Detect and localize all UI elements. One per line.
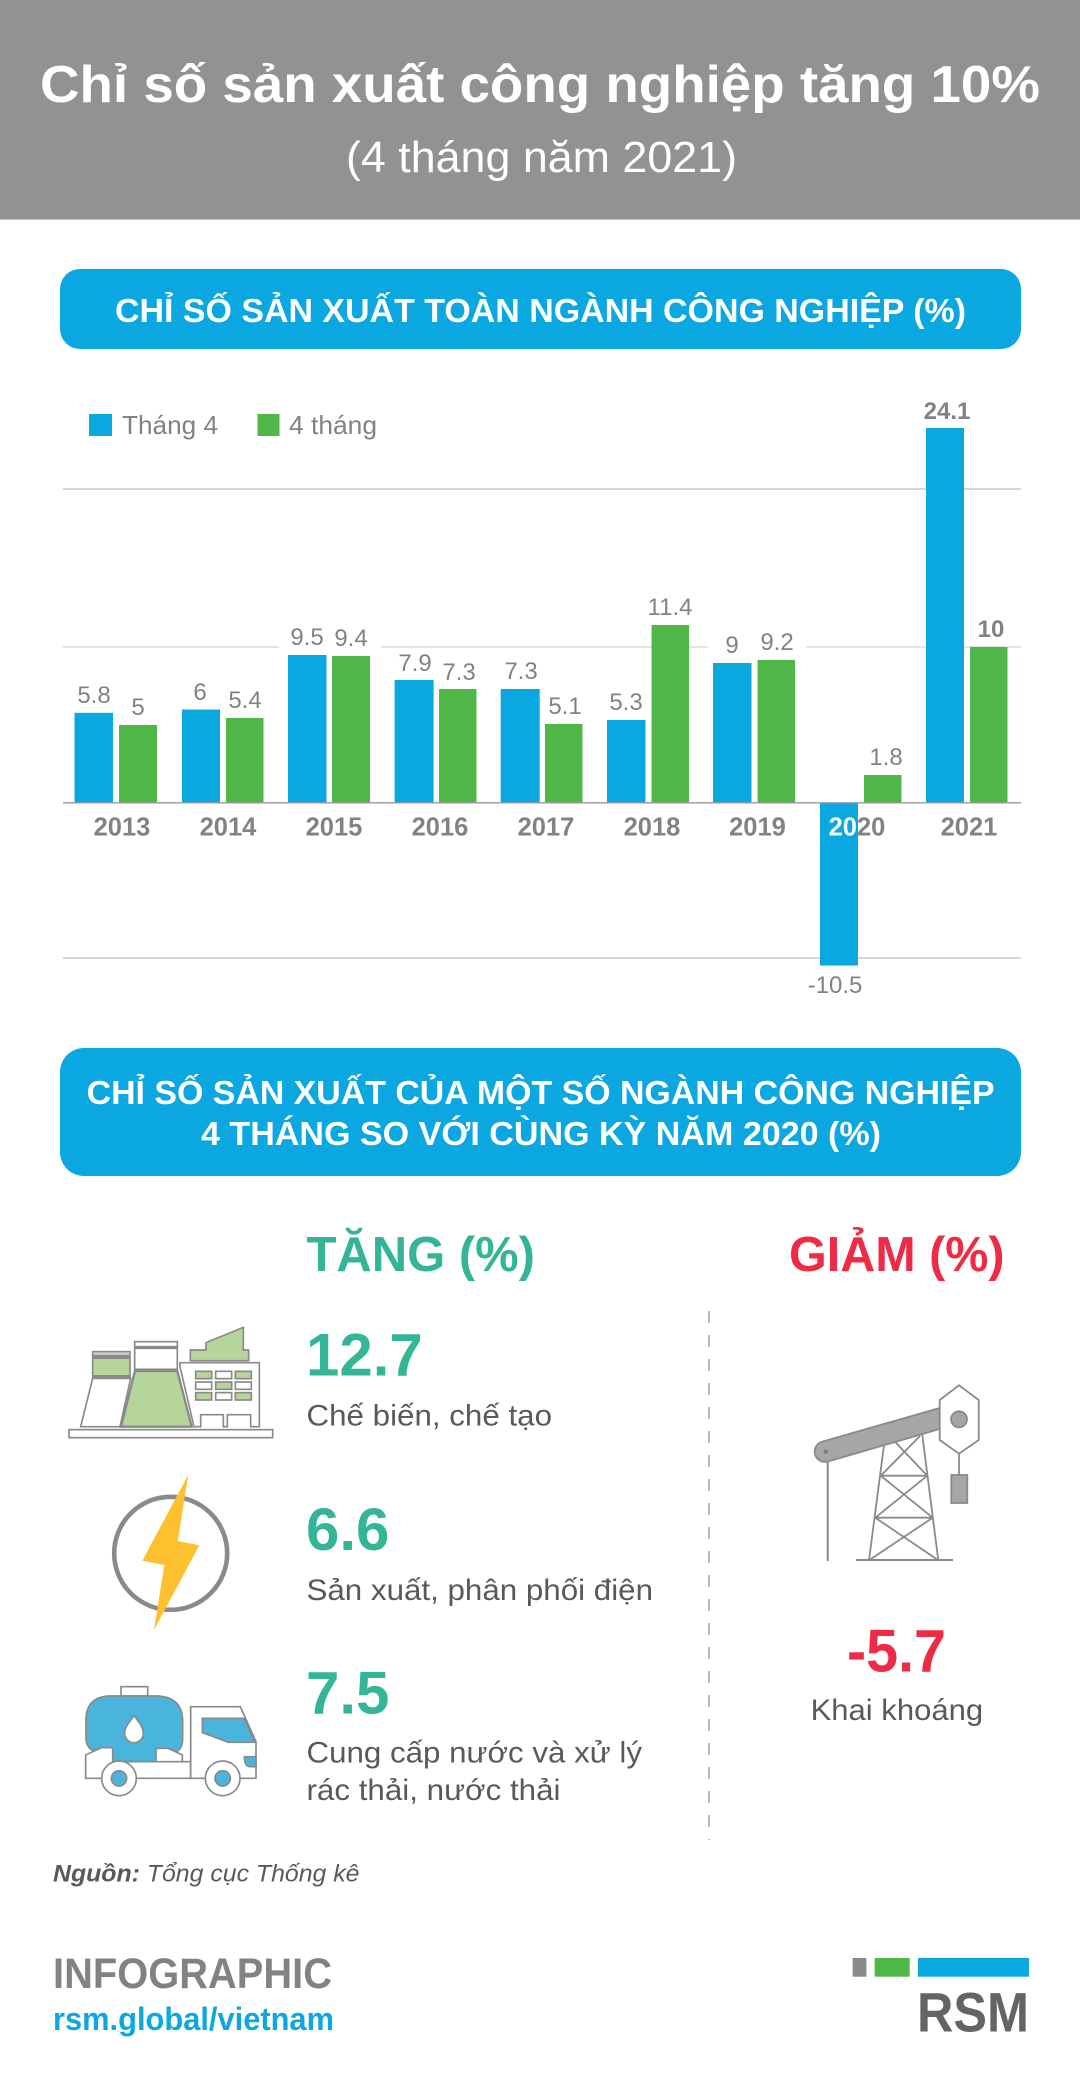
data labels: 4 tháng: 5.4 bbox=[228, 687, 262, 714]
data labels: Tháng 4 bbox=[77, 398, 970, 999]
year axis labels: 2015 bbox=[306, 814, 362, 842]
data labels: 4 tháng: 9.4 bbox=[334, 625, 368, 652]
title: Chỉ số sản xuất công nghiệp tăng 10% bbox=[40, 56, 1040, 114]
data labels: Tháng 4: 5.3 bbox=[609, 689, 643, 716]
stat: manufacturing: 12.7 bbox=[306, 1322, 423, 1388]
data labels: 4 tháng: 11.4 bbox=[648, 594, 692, 621]
header banner bbox=[0, 0, 1080, 220]
icon: lightning bolt bbox=[114, 1475, 227, 1630]
heading: decrease: GIẢM (%) bbox=[789, 1227, 1004, 1282]
year axis labels: 2016 bbox=[412, 814, 468, 842]
legend: 4 tháng bbox=[289, 410, 377, 440]
stat: water and waste: Cung cấp nước và xử lý bbox=[306, 1736, 642, 1770]
stat: water and waste: 7.5 bbox=[306, 1660, 389, 1726]
data labels: 4 tháng: 9.2 bbox=[760, 629, 794, 656]
year axis labels: 2013 bbox=[94, 814, 150, 842]
data labels: Tháng 4: 6 bbox=[193, 679, 207, 706]
year axis labels: 2020 bbox=[829, 814, 885, 842]
data labels: 4 tháng: 7.3 bbox=[442, 659, 476, 686]
data labels: 4 tháng: 1.8 bbox=[869, 744, 903, 771]
data labels: 4 tháng: 5.1 bbox=[548, 693, 582, 720]
icon: oil pump bbox=[815, 1385, 979, 1561]
stat: manufacturing: Chế biến, chế tạo bbox=[306, 1400, 552, 1433]
section heading: industries: 4 THÁNG SO VỚI CÙNG KỲ NĂM 2020 (%) bbox=[201, 1115, 881, 1152]
legend bbox=[89, 410, 377, 440]
section heading: overall index: CHỈ SỐ SẢN XUẤT TOÀN NGÀNH CÔNG NGHIỆP (%) bbox=[115, 291, 966, 329]
data labels: Tháng 4: 7.9 bbox=[398, 650, 432, 677]
year axis labels: 2017 bbox=[518, 814, 574, 842]
subtitle: (4 tháng năm 2021) bbox=[346, 133, 737, 182]
stat: mining: Khai khoáng bbox=[811, 1694, 983, 1727]
stat: electricity bbox=[306, 1496, 653, 1607]
data labels: 4 tháng: 5 bbox=[131, 694, 145, 721]
stat: manufacturing bbox=[306, 1322, 552, 1433]
year axis labels: 2019 bbox=[729, 814, 786, 842]
icon: water truck bbox=[86, 1687, 256, 1796]
data labels: 4 tháng bbox=[131, 594, 1004, 771]
section heading: industries bbox=[60, 1048, 1021, 1176]
year axis labels: 2021 bbox=[941, 814, 997, 842]
footer label: INFOGRAPHIC bbox=[53, 1950, 332, 1998]
stat: electricity: 6.6 bbox=[306, 1496, 389, 1563]
RSM logo: RSM bbox=[917, 1981, 1029, 2044]
section heading: overall index bbox=[60, 269, 1021, 349]
section heading: industries: CHỈ SỐ SẢN XUẤT CỦA MỘT SỐ NGÀNH CÔNG NGHIỆP bbox=[87, 1073, 995, 1111]
stat: water and waste bbox=[306, 1660, 642, 1807]
data labels: Tháng 4: 5.8 bbox=[77, 682, 111, 709]
year axis labels bbox=[94, 814, 997, 842]
year axis labels: 2014 bbox=[200, 814, 257, 842]
data labels: Tháng 4: 9.5 bbox=[290, 624, 324, 651]
stat: mining: -5.7 bbox=[847, 1617, 946, 1684]
data labels: Tháng 4: 24.1 bbox=[924, 398, 970, 425]
source note: Nguồn: Tổng cục Thống kê bbox=[53, 1861, 360, 1888]
data labels: Tháng 4: -10.5 bbox=[808, 972, 862, 999]
bar chart bbox=[63, 398, 1021, 999]
RSM logo bbox=[853, 1958, 1029, 2044]
data labels: Tháng 4: 7.3 bbox=[504, 658, 538, 685]
stat: electricity: Sản xuất, phân phối điện bbox=[306, 1574, 653, 1607]
data labels: Tháng 4: 9 bbox=[725, 632, 739, 659]
icon: factory bbox=[69, 1327, 273, 1438]
footer website: rsm.global/vietnam bbox=[53, 2001, 334, 2037]
year axis labels: 2018 bbox=[624, 814, 680, 842]
heading: increase: TĂNG (%) bbox=[306, 1228, 535, 1282]
stat: water and waste: rác thải, nước thải bbox=[306, 1774, 560, 1807]
stat: mining bbox=[811, 1617, 983, 1727]
legend: Tháng 4 bbox=[122, 410, 218, 440]
data labels: 4 tháng: 10 bbox=[978, 616, 1004, 643]
